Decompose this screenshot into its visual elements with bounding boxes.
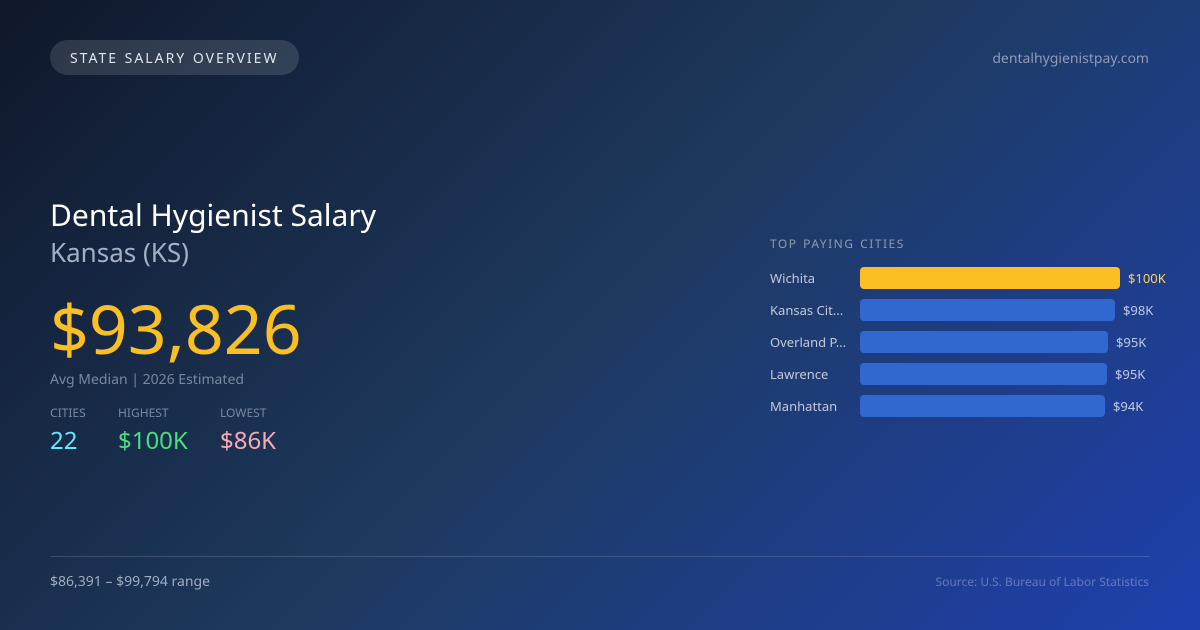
chart heading: TOP PAYING CITIES [770,235,905,252]
row: Kansas City: Kansas Cit... [770,301,843,319]
stat: lowest [220,404,276,457]
row: Kansas City [770,299,1154,321]
row: Wichita: Wichita [770,269,815,287]
stat: highest: HIGHEST [118,404,169,421]
salary range: $86,391 – $99,794 range [50,572,210,591]
row: Manhattan: Manhattan [770,397,837,415]
source note: Source: U.S. Bureau of Labor Statistics [936,573,1149,590]
stat: highest: $100K [118,424,188,457]
row: Wichita: $100K [1128,269,1166,287]
stats row [50,404,276,457]
stat: lowest: LOWEST [220,404,266,421]
row: Manhattan: $94K [1113,397,1143,415]
bar chart: top paying cities [770,267,1166,417]
salary caption: Avg Median | 2026 Estimated [50,370,244,389]
row: Wichita [770,267,1166,289]
badge: state salary overview [50,40,299,75]
stat: highest [118,404,188,457]
title: Dental Hygienist Salary [50,194,376,235]
headline salary: $93,826 [50,281,302,374]
row: Manhattan [770,395,1144,417]
stat: cities: 22 [50,424,77,457]
stat: cities: CITIES [50,404,86,421]
row: Kansas City: $98K [1123,301,1153,319]
subtitle: state: Kansas (KS) [50,234,189,270]
row: Overland Park: $95K [1116,333,1146,351]
stat: cities [50,404,86,457]
row: Overland Park [770,331,1146,353]
website domain: dentalhygienistpay.com [992,49,1149,68]
row: Lawrence [770,363,1146,385]
row: Lawrence: $95K [1115,365,1145,383]
stat: lowest: $86K [220,424,276,457]
row: Overland Park: Overland P... [770,333,846,351]
badge: state salary overview: STATE SALARY OVERVIEW [70,49,278,68]
row: Lawrence: Lawrence [770,365,828,383]
